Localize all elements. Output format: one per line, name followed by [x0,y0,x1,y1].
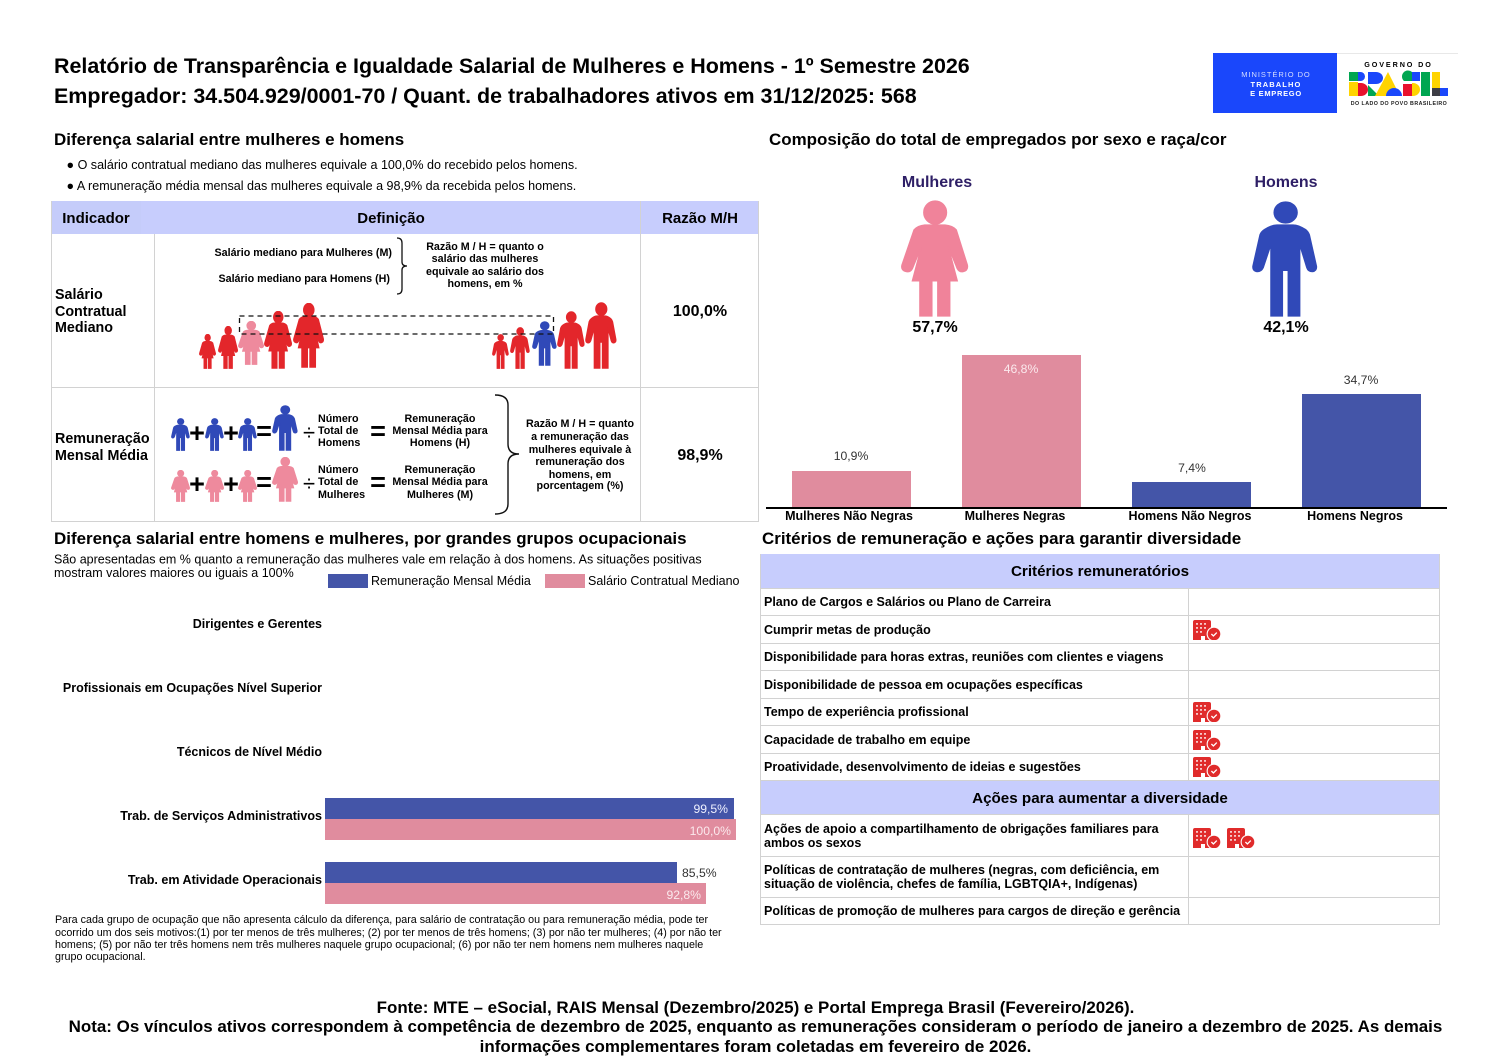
bar: homens negros: Homens Negros [1307,509,1403,523]
formula: homens: ÷ [303,420,315,445]
logo: ministério e governo: MINISTÉRIO DO [1241,70,1311,79]
bar: homens não negros: 7,4% [1178,461,1206,475]
text block: nota sobre cálculo: grupo ocupacional. [55,951,146,963]
bar: homens negros: 34,7% [1344,373,1378,387]
panel: tabela de indicadores [51,201,759,522]
heading: grupos ocupacionais: Diferença salarial entre homens e mulheres, por grandes grupos ocupacionais [54,529,687,548]
text block: razão salário: homens, em % [447,278,523,290]
bar: homens negros [1302,373,1421,523]
text block: explicação [54,552,702,580]
text block: razão salário [426,241,544,290]
header: critérios remuneratórios: Critérios remuneratórios [1011,563,1189,580]
text block: razão remuneração [526,418,634,492]
footer: fonte e nota: Nota: Os vínculos ativos correspondem à competência de dezembro de 2025, enquanto as remunerações consideram o período de janeiro a dezembro de 2025. As demais [69,1017,1442,1036]
text block: razão salário: equivale ao salário dos [426,266,544,278]
logo: ministério e governo: E EMPREGO [1250,89,1302,98]
formula: mulheres: Total de [318,476,358,488]
title [54,54,970,108]
criteria rows: Cumprir metas de produção [764,623,931,637]
action rows: Ações de apoio a compartilhamento de obrigações familiares para [764,822,1160,836]
category labels: Trab. de Serviços Administrativos [120,809,322,823]
figure: mulheres 57,7%: 57,7% [912,319,958,336]
bars: atividade operacionais: 85,5% [682,866,717,880]
text block: razão remuneração: a remuneração das [531,431,629,443]
formula: mulheres: = [256,467,272,497]
formula: homens: Número [318,413,359,425]
formula: mulheres: Número [318,464,359,476]
logo: ministério e governo: DO LADO DO POVO BRASILEIRO [1351,101,1447,107]
icons: critérios adotados [1193,620,1221,778]
formula: homens [172,406,489,450]
icons: mulheres em ordem salarial [199,304,323,368]
definition labels: salário mediano: Salário mediano para Mulheres (M) [214,247,392,259]
definition labels: salário mediano [214,247,392,285]
title: Relatório de Transparência e Igualdade Salarial de Mulheres e Homens - 1º Semestre 2026 [54,54,970,78]
bar chart: composição por sexo e raça/cor [766,355,1447,523]
bar: mulheres negras: Mulheres Negras [965,509,1065,523]
criteria rows: Disponibilidade de pessoa em ocupações específicas [764,678,1083,692]
bar: mulheres não negras: 10,9% [834,449,868,463]
dashed median box [240,316,554,334]
text block: razão remuneração: porcentagem (%) [537,480,624,492]
legend: Salário Contratual Mediano [588,574,740,588]
formula: mulheres: = [370,467,386,497]
action rows: ambos os sexos [764,836,861,850]
header: ações: Ações para aumentar a diversidade [972,790,1228,807]
brace: salário mediano [397,238,407,294]
brace: remuneração [495,395,519,514]
text block: razão remuneração: Razão M / H = quanto [526,418,634,430]
text block: nota sobre cálculo: ocorrido um dos seis motivos:(1) por ter menos de três mulheres; (2) por ter menos de três homens; (3) por não ter mulheres; (4) por não ter [55,927,722,939]
text block: bullets [66,158,578,193]
formula: homens: Homens [318,437,360,449]
action rows [764,822,1181,918]
figure: mulheres 57,7%: Mulheres [902,174,972,191]
text block: razão salário: salário das mulheres [432,253,538,265]
formula: mulheres [171,457,489,501]
value: 98,9%: 98,9% [677,447,723,464]
definition labels: salário mediano: Salário mediano para Homens (H) [218,273,390,285]
bars: serviços administrativos: 100,0% [690,824,731,838]
bars: serviços administrativos [325,798,736,840]
footer: fonte e nota: Fonte: MTE – eSocial, RAIS Mensal (Dezembro/2025) e Portal Emprega Brasil (Fevereiro/2026). [377,998,1134,1017]
text block: razão salário: Razão M / H = quanto o [426,241,544,253]
footer: fonte e nota [69,998,1442,1056]
text block: bullets: ● O salário contratual mediano das mulheres equivale a 100,0% do recebido pelos homens. [66,158,578,172]
criteria rows [764,595,1163,774]
footer: fonte e nota: informações complementares foram coletadas em fevereiro de 2026. [480,1037,1031,1056]
formula: homens: Homens (H) [410,437,470,449]
formula: homens: + [223,418,239,448]
category labels [63,617,322,887]
figure: homens 42,1%: 42,1% [1263,319,1309,336]
criteria rows: Disponibilidade para horas extras, reuniões com clientes e viagens [764,650,1163,664]
icons: ações adotadas [1193,828,1255,849]
text block: explicação: São apresentadas em % quanto a remuneração das mulheres vale em relação à dos homens. As situações positivas [54,552,702,566]
criteria rows: Capacidade de trabalho em equipe [764,733,970,747]
text block: razão remuneração: remuneração dos [535,456,625,468]
table header: Definição [357,210,425,227]
formula: homens: Mensal Média para [392,425,489,437]
row label: remuneração mensal média: Mensal Média [55,448,149,464]
heading: critérios: Critérios de remuneração e ações para garantir diversidade [762,529,1241,548]
formula: mulheres: Mensal Média para [392,476,489,488]
bars: atividade operacionais: 92,8% [666,888,701,902]
criteria rows: Proatividade, desenvolvimento de ideias e sugestões [764,760,1081,774]
row label: salário contratual mediano: Contratual [55,304,126,320]
bars: serviços administrativos: 99,5% [693,802,728,816]
text block: razão remuneração: homens, em [549,469,611,481]
row label: salário contratual mediano: Salário [55,287,103,303]
formula: homens: Remuneração [405,413,476,425]
formula: mulheres: + [223,469,239,499]
action rows: situação de violência, chefes de família, LGBTQIA+, Indígenas) [764,877,1137,891]
heading: composição: Composição do total de empregados por sexo e raça/cor [769,130,1227,149]
figure: homens 42,1%: Homens [1254,174,1318,191]
bar: homens não negros [1129,461,1252,523]
bar: mulheres negras: 46,8% [1004,362,1038,376]
text block: nota sobre cálculo: homens; (5) por não ter três homens nem três mulheres naquele grupo ocupacional; (6) por não ter nem homens nem mulheres naquele [55,939,703,951]
table header: Indicador [62,210,130,227]
legend [328,574,740,588]
category labels: Profissionais em Ocupações Nível Superior [63,681,322,695]
figure: mulheres 57,7% [902,174,972,336]
text block: nota sobre cálculo [55,914,722,963]
logo: ministério e governo [1213,53,1458,113]
row label: remuneração mensal média [55,431,150,464]
formula: homens: Total de [318,425,358,437]
icons: homens em ordem salarial [492,303,616,368]
row label: salário contratual mediano [55,287,126,336]
text block: nota sobre cálculo: Para cada grupo de ocupação que não apresenta cálculo da diferença, para salário de contratação ou para remuneração média, pode ter [55,914,709,926]
row label: salário contratual mediano: Mediano [55,320,113,336]
category labels: Técnicos de Nível Médio [177,745,322,759]
criteria rows: Tempo de experiência profissional [764,705,969,719]
formula: mulheres: Mulheres (M) [407,489,473,501]
bar: homens não negros: Homens Não Negros [1129,509,1252,523]
bar: mulheres negras [962,355,1081,523]
bar chart: grupos ocupacionais [63,617,736,904]
legend: Remuneração Mensal Média [371,574,531,588]
formula: mulheres: Mulheres [318,489,365,501]
bars: atividade operacionais [325,862,717,904]
table header [51,201,759,234]
row label: remuneração mensal média: Remuneração [55,431,150,447]
action rows: Políticas de contratação de mulheres (negras, com deficiência, em [764,863,1159,877]
formula: mulheres: + [189,469,205,499]
title: Empregador: 34.504.929/0001-70 / Quant. de trabalhadores ativos em 31/12/2025: 568 [54,84,917,108]
logo: ministério e governo: TRABALHO [1251,80,1301,89]
bar: mulheres não negras: Mulheres Não Negras [785,509,913,523]
table header: Razão M/H [662,210,738,227]
bar: mulheres não negras [785,449,913,523]
text block: razão remuneração: mulheres equivale à [529,444,631,456]
category labels: Trab. em Atividade Operacionais [128,873,322,887]
figure: homens 42,1% [1253,174,1318,336]
criteria rows: Plano de Cargos e Salários ou Plano de Carreira [764,595,1052,609]
logo: ministério e governo: GOVERNO DO [1364,60,1433,69]
panel: critérios de remuneração [760,554,1440,924]
value: 100,0%: 100,0% [673,303,727,320]
category labels: Dirigentes e Gerentes [193,617,322,631]
text block: explicação: mostram valores maiores ou iguais a 100% [54,566,294,580]
action rows: Políticas de promoção de mulheres para cargos de direção e gerência [764,904,1181,918]
heading: diferença salarial: Diferença salarial entre mulheres e homens [54,130,404,149]
formula: mulheres: ÷ [303,471,315,496]
formula: mulheres: Remuneração [405,464,476,476]
formula: homens: + [189,418,205,448]
text block: bullets: ● A remuneração média mensal das mulheres equivale a 98,9% da recebida pelos homens. [66,179,576,193]
formula: homens: = [370,416,386,446]
formula: homens: = [256,416,272,446]
